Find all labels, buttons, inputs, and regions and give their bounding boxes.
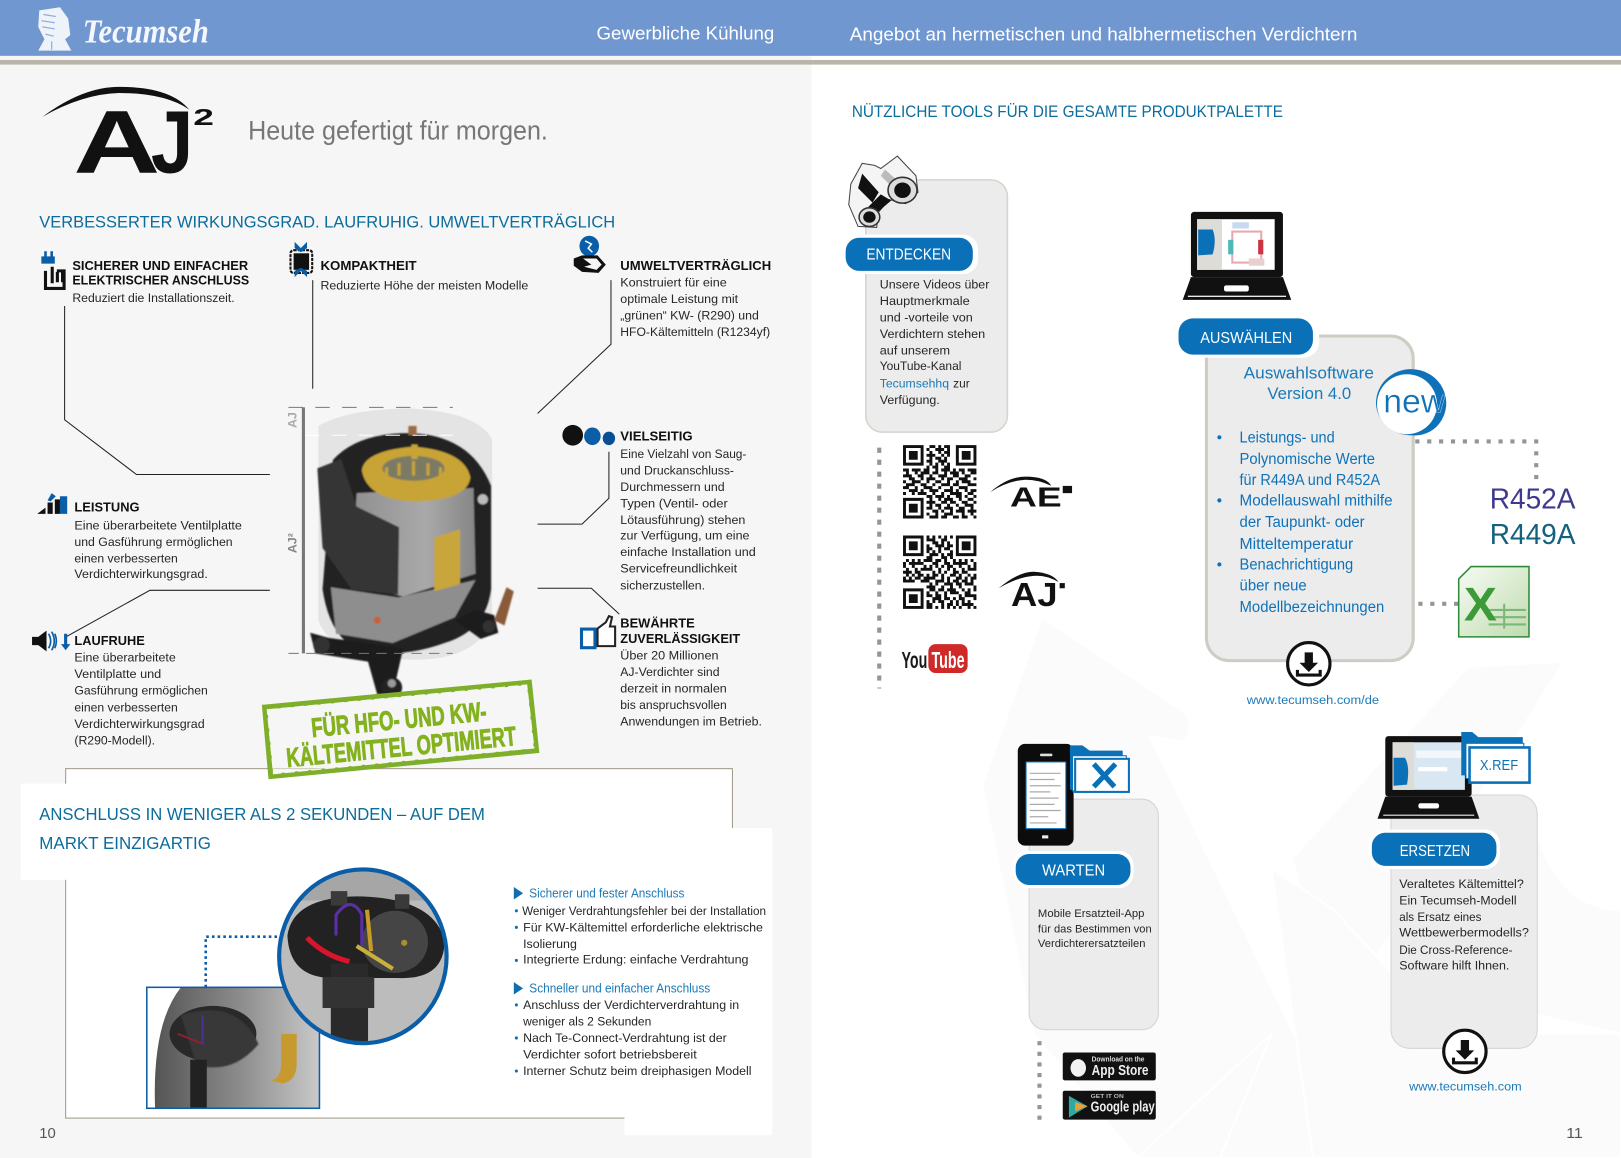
height dimension bar xyxy=(286,407,453,653)
compressor illustration xyxy=(310,408,514,698)
feature: proven reliability: derzeit in normalen xyxy=(620,682,727,696)
feature: compact: KOMPAKTHEIT xyxy=(320,258,417,273)
feature: environment: Konstruiert für eine xyxy=(620,275,727,289)
right page background xyxy=(812,0,1621,1158)
feature: versatile xyxy=(562,425,756,592)
website link: de: www.tecumseh.com/de xyxy=(1246,693,1379,707)
white patches xyxy=(21,784,772,1135)
feature: versatile: Typen (Ventil- oder xyxy=(620,497,728,511)
feature: safe connection: SICHERER UND EINFACHER xyxy=(72,258,249,273)
text: service: Mobile Ersatzteil-App xyxy=(1038,908,1144,920)
text: discover: zur xyxy=(953,377,970,391)
feature: environment: HFO-Kältemitteln (R1234yf) xyxy=(620,325,770,339)
tagline: Heute gefertigt für morgen. xyxy=(248,116,548,146)
YouTube logo: Tube xyxy=(931,647,965,673)
list: fast connection: Verdichter sofort betriebsbereit xyxy=(523,1048,697,1062)
feature: safe connection xyxy=(41,251,250,305)
feature: quiet running: Eine überarbeitete xyxy=(74,651,176,665)
feature: compact xyxy=(290,242,528,292)
list: fast connection: Nach Te-Connect-Verdrahtung ist der xyxy=(523,1031,727,1045)
icon: three dots xyxy=(562,425,615,446)
feature: proven reliability: AJ-Verdichter sind xyxy=(620,665,720,679)
icon: laptop with cross-reference xyxy=(1378,736,1479,819)
list: software features: der Taupunkt- oder xyxy=(1240,514,1365,531)
list: secure connection: Weniger Verdrahtungsfehler bei der Installation xyxy=(522,904,766,918)
section heading: efficiency: VERBESSERTER WIRKUNGSGRAD. LAUFRUHIG. UMWELTVERTRÄGLICH xyxy=(39,212,615,231)
list: software features: für R449A und R452A xyxy=(1240,472,1381,489)
text: replace: Ein Tecumseh-Modell xyxy=(1399,894,1517,908)
icon: Tecumseh chief head xyxy=(38,7,71,51)
heading: connection xyxy=(39,804,485,853)
refrigerant labels: R449A xyxy=(1490,519,1576,551)
header band xyxy=(0,0,1621,65)
feature: proven reliability: BEWÄHRTE xyxy=(620,616,695,631)
feature: performance xyxy=(37,493,242,581)
connection benefits text xyxy=(514,885,766,1078)
AJ2 logo xyxy=(42,87,214,192)
AJ2 logo: 2 xyxy=(193,104,214,130)
feature: versatile: Lötausführung) stehen xyxy=(620,513,745,527)
heading: tools: NÜTZLICHE TOOLS FÜR DIE GESAMTE PRODUKTPALETTE xyxy=(852,102,1283,121)
list: secure connection: Integrierte Erdung: einfache Verdrahtung xyxy=(523,953,749,967)
AJ logo small: AJ xyxy=(1011,577,1058,614)
QR code 2 xyxy=(903,536,976,609)
header section label: Gewerbliche Kühlung xyxy=(597,22,774,43)
page number 10: 10 xyxy=(39,1126,56,1142)
pill: WARTEN: WARTEN xyxy=(1042,862,1105,880)
text: replace: Die Cross-Reference- xyxy=(1399,943,1512,957)
icon: compact xyxy=(290,242,312,277)
list: software features: Mitteltemperatur xyxy=(1240,536,1353,553)
stamp: optimized for HFO and natural refrigerants xyxy=(265,682,537,776)
feature: versatile: Servicefreundlichkeit xyxy=(620,562,738,576)
badge: new xyxy=(1376,369,1446,435)
dotted lines to refrigerants and Excel xyxy=(1415,441,1536,604)
website link: www.tecumseh.com xyxy=(1408,1080,1522,1094)
text: replace: Software hilft Ihnen. xyxy=(1399,959,1509,973)
panel: replace xyxy=(1369,732,1537,1073)
panel: discover xyxy=(843,156,1007,432)
text: discover: Unsere Videos über xyxy=(880,277,989,291)
feature: compact: Reduzierte Höhe der meisten Modelle xyxy=(320,278,528,292)
icon: download xyxy=(1288,643,1330,685)
dotted link xyxy=(206,937,279,987)
feature: versatile: einfache Installation und xyxy=(620,545,756,559)
software version: Version 4.0 xyxy=(1267,384,1351,403)
badge: App Store: Download on the xyxy=(1092,1055,1144,1064)
icon: X.REF folder xyxy=(1461,732,1530,783)
text: service: für das Bestimmen von xyxy=(1038,924,1152,936)
feature: versatile: Durchmessern und xyxy=(620,480,725,494)
left page background xyxy=(0,0,812,1158)
AE logo: AE xyxy=(1010,482,1062,513)
feature: performance: LEISTUNG xyxy=(74,500,140,515)
feature: quiet running xyxy=(32,631,208,747)
feature: performance: Eine überarbeitete Ventilplatte xyxy=(74,518,242,532)
dotted line: QR links xyxy=(877,448,881,689)
Tecumseh wordmark: Tecumseh xyxy=(83,13,209,50)
feature: versatile: sicherzustellen. xyxy=(620,578,705,592)
software version xyxy=(1244,363,1374,403)
pill: WARTEN xyxy=(1013,851,1134,888)
background pattern xyxy=(982,617,1621,1158)
text: replace: als Ersatz eines xyxy=(1399,910,1481,924)
QR code 1 xyxy=(903,445,976,518)
feature: quiet running: einen verbesserten xyxy=(74,700,178,714)
text: discover: auf unserem xyxy=(880,344,950,358)
feature: performance: einen verbesserten xyxy=(74,551,178,565)
list: fast connection: Interner Schutz beim dreiphasigen Modell xyxy=(523,1064,752,1078)
text: service: Verdichterersatzteilen xyxy=(1038,938,1145,950)
panel: service xyxy=(1013,744,1158,1030)
stamp: optimized for HFO and natural refrigerants: KÄLTEMITTEL OPTIMIERT xyxy=(285,721,518,773)
icon: plug and hand xyxy=(41,251,64,288)
badge: App Store: App Store xyxy=(1092,1063,1149,1079)
feature: proven reliability: Anwendungen im Betrieb. xyxy=(620,715,762,729)
list: software features: Benachrichtigung xyxy=(1240,557,1353,574)
list: software features xyxy=(1217,429,1393,616)
icon: X.REF folder: X.REF xyxy=(1480,758,1518,774)
dotted line: apps xyxy=(1037,1041,1041,1121)
list: secure connection: Isolierung xyxy=(523,937,577,951)
feature: quiet running: (R290-Modell). xyxy=(74,733,155,747)
heading: connection: ANSCHLUSS IN WENIGER ALS 2 SEKUNDEN – AUF DEM xyxy=(39,804,485,824)
stamp: optimized for HFO and natural refrigerants: FÜR HFO- UND KW- xyxy=(310,696,488,743)
connector photo: zoomed detail xyxy=(279,869,447,1046)
feature: safe connection: ELEKTRISCHER ANSCHLUSS xyxy=(72,272,250,287)
list: secure connection: Für KW-Kältemittel erforderliche elektrische xyxy=(523,920,763,934)
pill: ENTDECKEN: ENTDECKEN xyxy=(866,245,951,263)
badge: Google Play xyxy=(1063,1091,1156,1120)
icon: tools folder xyxy=(1070,745,1129,792)
pill: AUSWÄHLEN: AUSWÄHLEN xyxy=(1200,329,1292,347)
icon: laptop xyxy=(1183,212,1291,300)
feature: proven reliability: Über 20 Millionen xyxy=(620,649,719,663)
feature: environment: optimale Leistung mit xyxy=(620,292,739,306)
AE logo xyxy=(990,477,1072,513)
feature: performance: Verdichterwirkungsgrad. xyxy=(74,567,208,581)
subheading: fast connection: Schneller und einfacher Anschluss xyxy=(529,980,710,995)
software version: Auswahlsoftware xyxy=(1244,363,1374,382)
icon: Excel xyxy=(1459,567,1529,637)
badge: Google Play: GET IT ON xyxy=(1091,1094,1124,1100)
feature: versatile: VIELSEITIG xyxy=(620,428,693,443)
feature: quiet running: Gasführung ermöglichen xyxy=(74,684,208,698)
YouTube logo xyxy=(901,644,968,673)
icon: rising bars xyxy=(37,493,67,514)
AJ logo small xyxy=(999,572,1065,614)
feature: environment: „grünen“ KW- (R290) und xyxy=(620,308,759,322)
text: replace: Veraltetes Kältemittel? xyxy=(1399,877,1524,891)
pill: AUSWÄHLEN xyxy=(1175,315,1319,358)
list: secure connection xyxy=(515,904,766,967)
connector photo: compressor housing xyxy=(147,987,319,1108)
feature: safe connection: Reduziert die Installationszeit. xyxy=(72,291,235,305)
list: fast connection xyxy=(515,998,752,1078)
icon: speaker xyxy=(32,631,70,651)
feature: performance: und Gasführung ermöglichen xyxy=(74,535,233,549)
subheading: secure connection: Sicherer und fester Anschluss xyxy=(529,885,684,900)
icon: Excel: X xyxy=(1464,578,1497,631)
text: discover: Tecumsehhq xyxy=(880,377,949,391)
icon: globe in hand xyxy=(574,236,606,273)
badge: App Store xyxy=(1063,1052,1156,1080)
AJ2 logo: J xyxy=(151,93,193,192)
icon: download xyxy=(1444,1030,1486,1073)
feature: versatile: Eine Vielzahl von Saug- xyxy=(620,447,746,461)
AJ2 logo: A xyxy=(73,93,160,192)
feature: quiet running: LAUFRUHE xyxy=(74,633,145,648)
icon: thumbs up xyxy=(582,616,615,648)
feature: environment: UMWELTVERTRÄGLICH xyxy=(620,258,771,273)
feature: environment xyxy=(574,236,771,339)
page number 11: 11 xyxy=(1566,1126,1583,1142)
panel: select xyxy=(1175,212,1413,685)
list: software features: über neue xyxy=(1240,577,1307,594)
feature: versatile: und Druckanschluss- xyxy=(620,464,734,478)
badge: Google Play: Google play xyxy=(1091,1099,1155,1115)
text: discover xyxy=(880,277,989,407)
text: discover: Hauptmerkmale xyxy=(880,294,970,308)
pill: ERSETZEN: ERSETZEN xyxy=(1400,842,1470,860)
text: replace xyxy=(1399,877,1529,973)
refrigerant labels: R452A xyxy=(1490,484,1576,516)
list: fast connection: weniger als 2 Sekunden xyxy=(522,1015,651,1029)
badge: new: new xyxy=(1383,384,1445,421)
pill: ENTDECKEN xyxy=(843,235,978,274)
refrigerant labels xyxy=(1490,484,1576,551)
text: discover: Verdichtern stehen xyxy=(880,327,985,341)
header title: Angebot an hermetischen und halbhermetischen Verdichtern xyxy=(850,23,1357,44)
feature: proven reliability: ZUVERLÄSSIGKEIT xyxy=(620,631,740,646)
list: software features: Polynomische Werte xyxy=(1240,451,1375,468)
feature: quiet running: Verdichterwirkungsgrad xyxy=(74,717,205,731)
feature: quiet running: Ventilplatte und xyxy=(74,667,161,681)
list: fast connection: Anschluss der Verdichterverdrahtung in xyxy=(523,998,739,1012)
text: discover: YouTube-Kanal xyxy=(880,359,961,373)
list: software features: Modellauswahl mithilfe xyxy=(1240,493,1393,510)
icon: phone xyxy=(1018,744,1074,846)
text: discover: Verfügung. xyxy=(880,393,940,407)
icon: binoculars xyxy=(849,156,918,227)
pill: ERSETZEN xyxy=(1369,830,1500,869)
feature: proven reliability xyxy=(582,616,762,729)
connection panel frame xyxy=(66,769,732,1118)
connector lines xyxy=(64,280,619,638)
height dimension bar: AJ xyxy=(286,412,300,428)
YouTube logo: You xyxy=(901,647,927,673)
text: replace: Wettbewerbermodells? xyxy=(1399,926,1529,940)
heading: connection: MARKT EINZIGARTIG xyxy=(39,833,211,853)
feature: proven reliability: bis anspruchsvollen xyxy=(620,698,727,712)
feature: versatile: zur Verfügung, um eine xyxy=(620,529,750,543)
list: software features: Leistungs- und xyxy=(1240,429,1335,446)
height dimension bar: AJ² xyxy=(286,533,300,553)
text: discover: und -vorteile von xyxy=(880,311,973,325)
list: software features: Modellbezeichnungen xyxy=(1240,599,1384,616)
text: service xyxy=(1038,908,1152,950)
